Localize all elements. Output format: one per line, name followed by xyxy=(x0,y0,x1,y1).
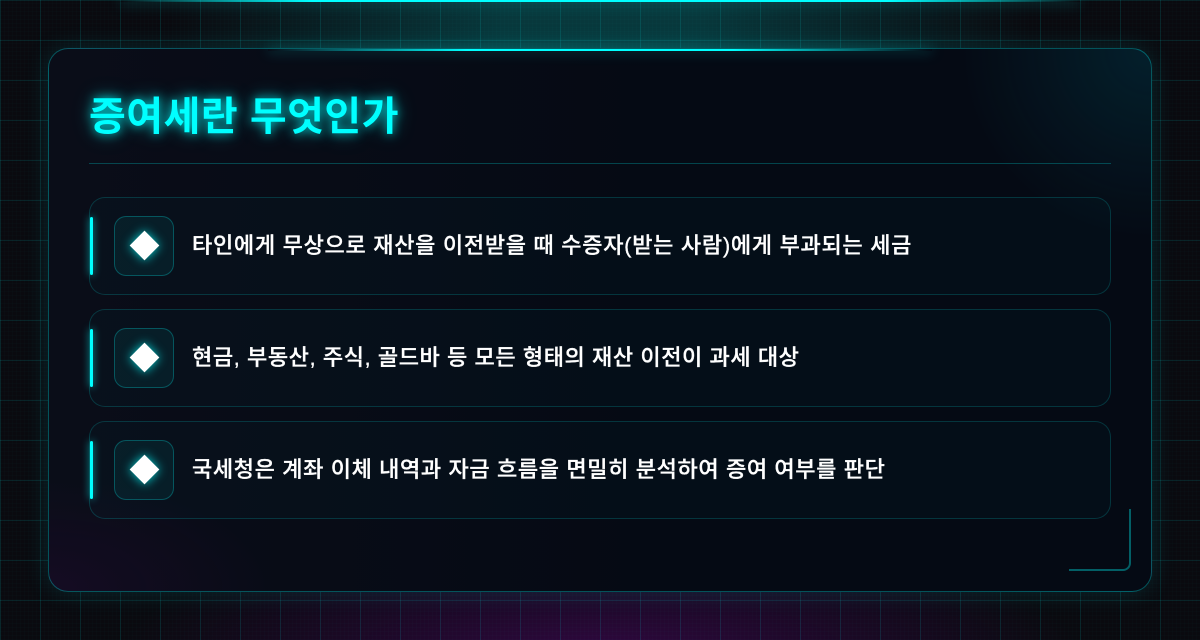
list item 2 xyxy=(89,309,1111,407)
icon: diamond 3 xyxy=(114,440,174,500)
accent bar 3 xyxy=(90,441,93,499)
accent bar 1 xyxy=(90,217,93,275)
panel: main card xyxy=(48,48,1152,592)
top glow bar xyxy=(120,0,1080,2)
list item 1 xyxy=(89,197,1111,295)
text 3: 국세청은 계좌 이체 내역과 자금 흐름을 면밀히 분석하여 증여 여부를 판단 xyxy=(192,457,886,482)
text 2: 현금, 부동산, 주식, 골드바 등 모든 형태의 재산 이전이 과세 대상 xyxy=(192,345,800,370)
accent bar 2 xyxy=(90,329,93,387)
card top glow line xyxy=(268,49,932,51)
list item 3 xyxy=(89,421,1111,519)
top glow band xyxy=(120,0,1080,48)
icon: diamond 2 xyxy=(114,328,174,388)
corner bracket xyxy=(1069,509,1131,571)
title: 증여세란 무엇인가 xyxy=(89,95,399,139)
icon: diamond 1 xyxy=(114,216,174,276)
text 1: 타인에게 무상으로 재산을 이전받을 때 수증자(받는 사람)에게 부과되는 세금 xyxy=(192,233,912,258)
